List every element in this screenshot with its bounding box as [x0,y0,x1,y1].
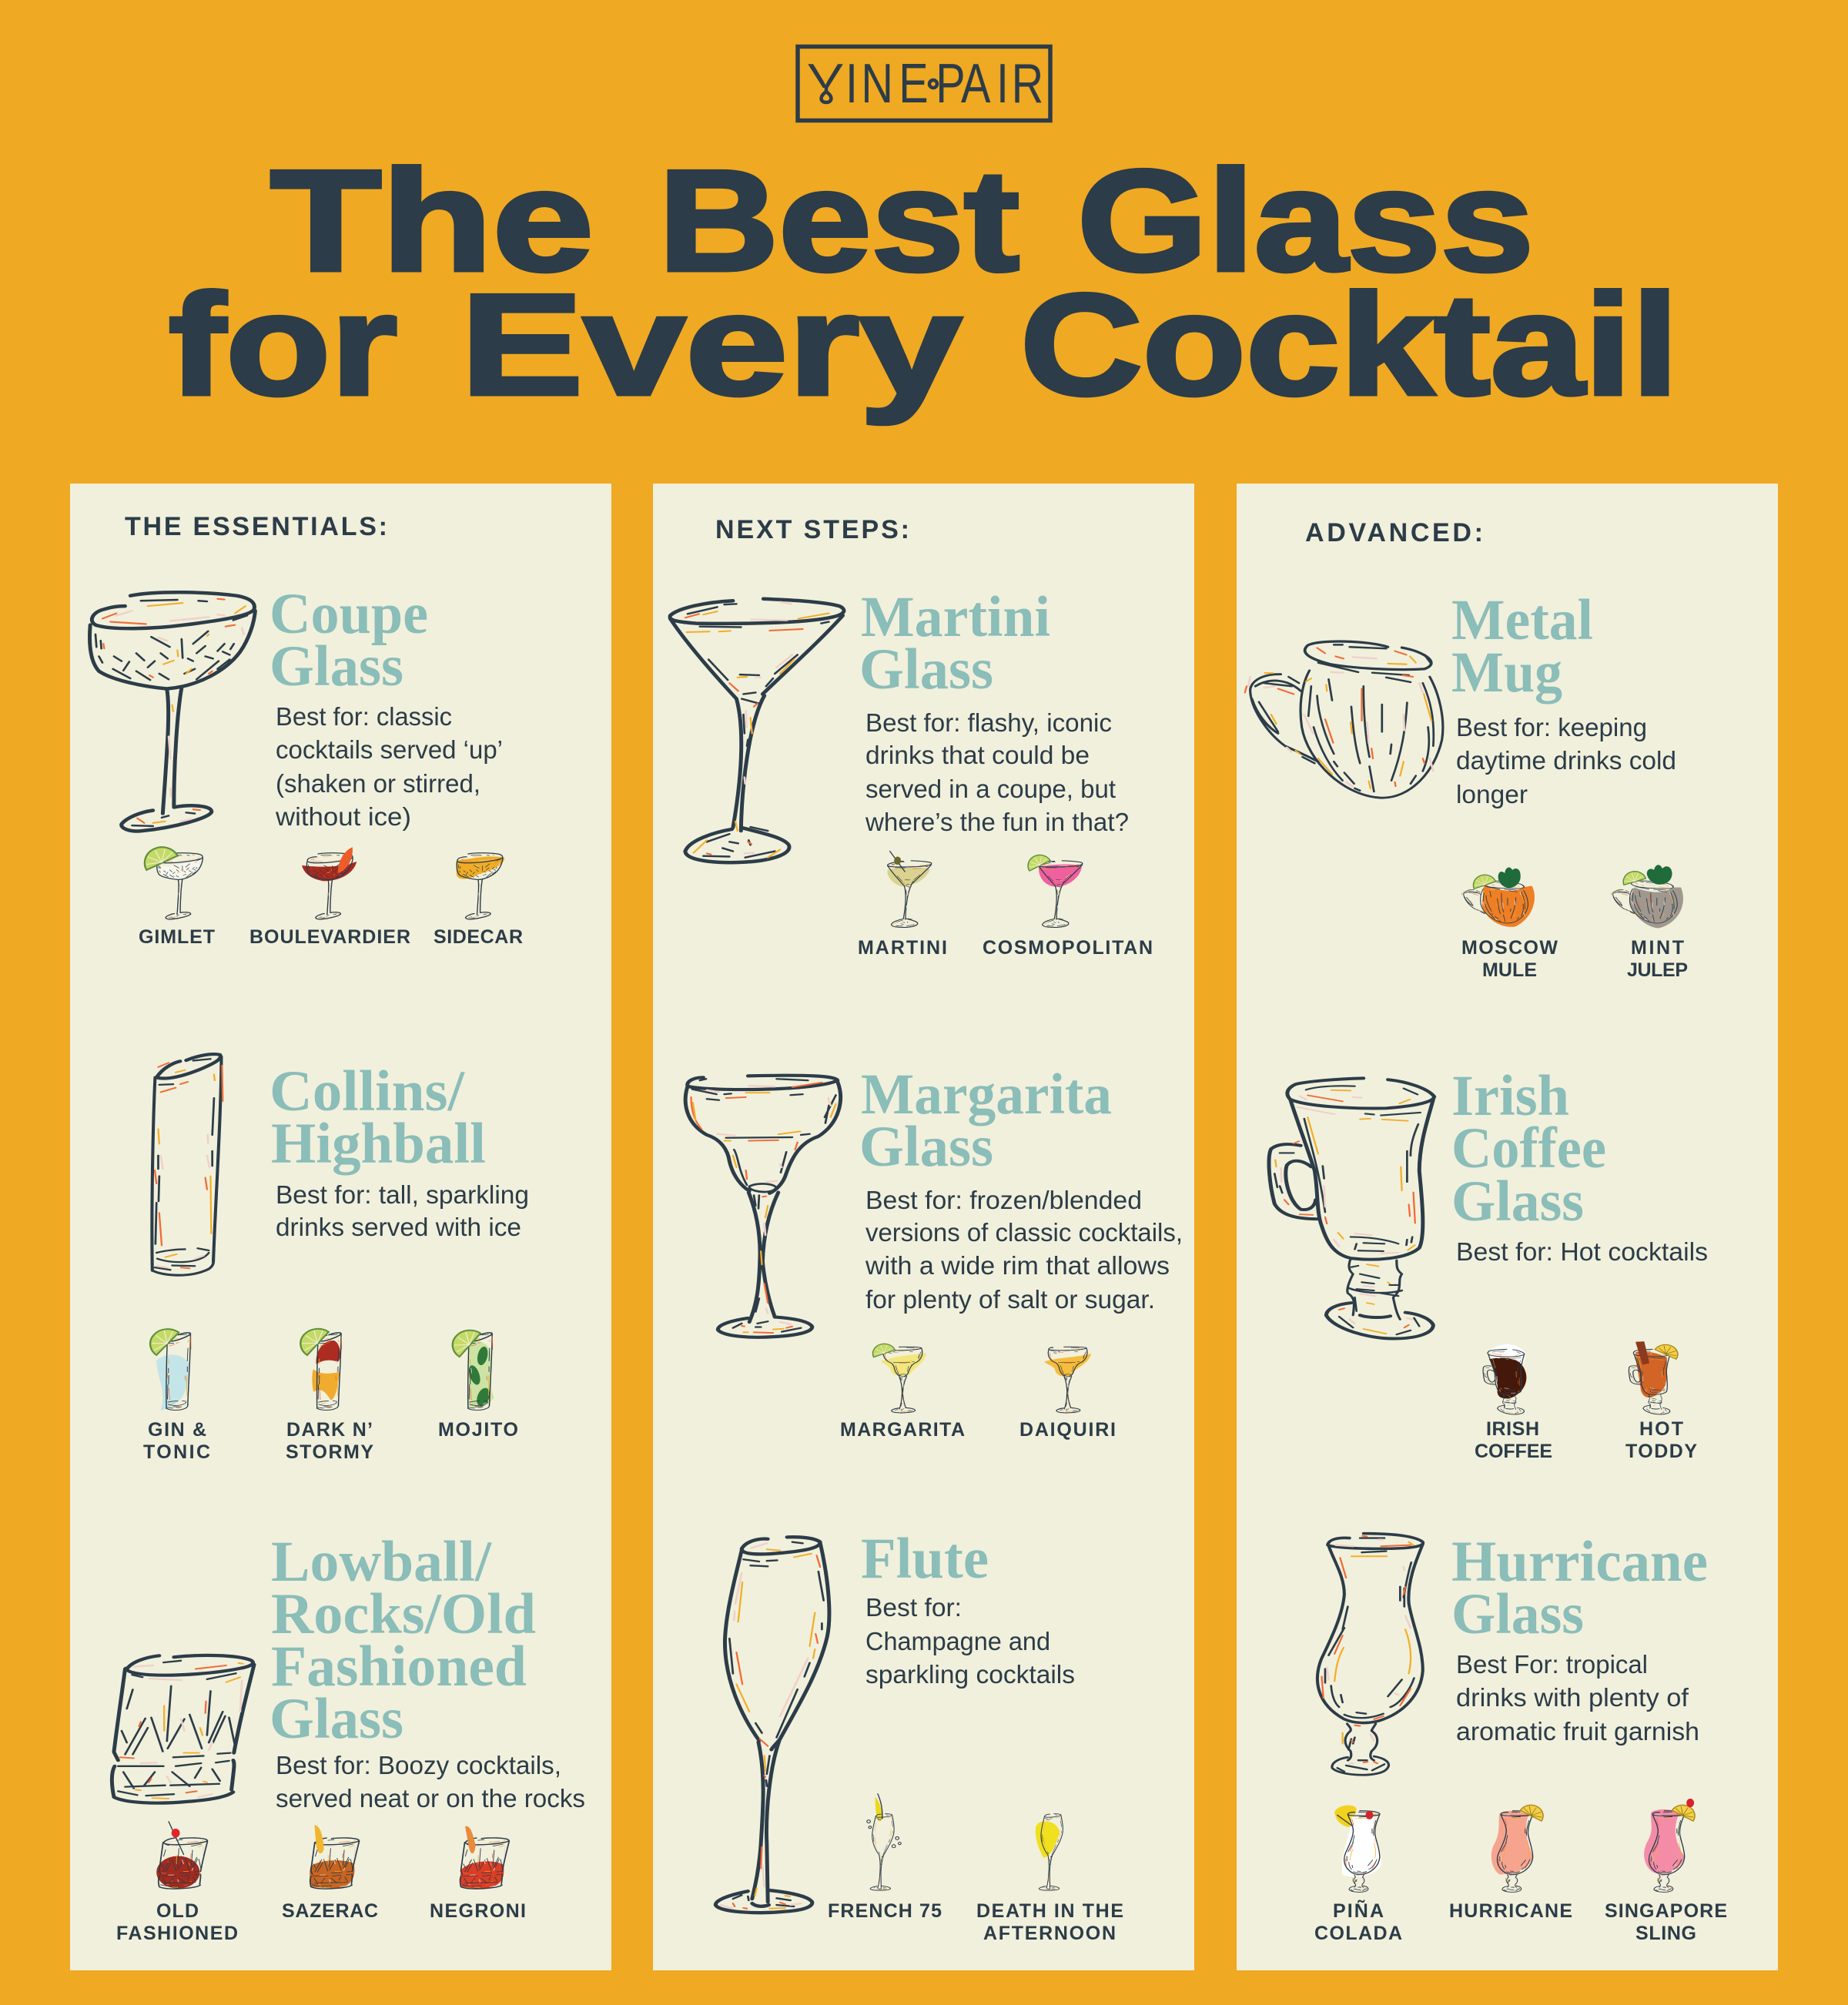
description: martini [865,708,1129,836]
drink icon: margarita [869,1341,926,1413]
description: margarita: versions of classic cocktails, [865,1218,1183,1247]
label: death in the afternoon: DEATH IN THE [976,1900,1123,1922]
glass name: metal mug: Metal [1451,588,1593,652]
description: margarita: for plenty of salt or sugar. [865,1285,1155,1314]
description: martini: where’s the fun in that? [865,808,1129,836]
label: cosmopolitan: COSMOPOLITAN [983,937,1153,959]
drink icon: pina colada [1334,1806,1381,1892]
icon: lowball glass [112,1655,254,1803]
drink icon: old fashioned [156,1822,208,1889]
glass name: margarita: Margarita [861,1063,1112,1126]
description: coupe [275,702,503,831]
logo: VinePair [798,46,1050,120]
label: sidecar: SIDECAR [434,926,523,948]
heading: the essentials: THE ESSENTIALS: [125,512,387,541]
drink icon: cosmopolitan [1024,851,1083,927]
glass name: lowball: Lowball/ [271,1530,492,1594]
description: martini: served in a coupe, but [865,775,1116,803]
label: hurricane: HURRICANE [1449,1900,1572,1922]
label: sazerac: SAZERAC [282,1900,378,1922]
description: flute: Best for: [865,1593,962,1622]
description: metal mug: daytime drinks cold [1456,746,1676,775]
description: lowball [276,1751,585,1813]
drink icon: boulevardier [302,847,357,919]
glass name: margarita: Glass [859,1115,993,1179]
description: collins: Best for: tall, sparkling [276,1180,529,1209]
title: The [270,140,594,301]
drink icon: dark n stormy [293,1323,342,1410]
label: pina colada [1314,1899,1402,1944]
logo: VinePair: V [808,57,843,95]
icon: martini glass [670,599,844,862]
label: old fashioned: OLD [156,1900,199,1922]
drink icon: hot toddy [1629,1341,1682,1414]
title: Every [460,264,962,425]
glass name: irish coffee: Glass [1451,1170,1584,1233]
glass name: martini: Martini [861,585,1050,649]
glass name: lowball: Glass [270,1687,403,1751]
label: pina colada: PIÑA [1333,1899,1384,1922]
icon: irish coffee glass [1269,1078,1435,1339]
label: negroni: NEGRONI [430,1900,526,1922]
icon: coupe glass [89,592,255,831]
glass name: hurricane: Glass [1451,1582,1584,1646]
title [169,140,1679,425]
description: margarita: Best for: frozen/blended [865,1186,1142,1214]
description: lowball: served neat or on the rocks [276,1784,585,1813]
description: hurricane: aromatic fruit garnish [1456,1717,1699,1746]
title: for [169,264,397,425]
logo: VinePair: INEPAIR [845,52,1043,114]
label: gin and tonic: GIN & [148,1419,206,1441]
glass name: irish coffee: Coffee [1451,1116,1606,1180]
label: boulevardier: BOULEVARDIER [249,926,410,948]
heading: next steps: NEXT STEPS: [715,515,909,544]
glass name: collins/highball: Highball [271,1112,486,1176]
drink icon: mint julep [1611,865,1683,929]
title: Cocktail [1020,264,1679,425]
label: irish coffee: COFFEE [1475,1441,1552,1462]
label: mojito: MOJITO [438,1419,518,1441]
drink icon: negroni [460,1826,509,1890]
icon: metal mug [1245,641,1443,798]
drink icon: hurricane [1491,1801,1548,1892]
glass name: coupe [270,582,428,698]
glass name: hurricane [1451,1530,1708,1646]
label: martini: MARTINI [858,937,947,959]
glass name: lowball [270,1530,536,1751]
glass name: martini: Glass [859,638,993,701]
description: collins [276,1180,529,1241]
label: death in the afternoon [976,1900,1123,1944]
description: coupe: Best for: classic [276,702,452,731]
description: flute: Champagne and [865,1627,1050,1655]
description: irish coffee: Best for: Hot cocktails [1456,1237,1708,1266]
label: mint julep: MINT [1631,937,1684,959]
glass name: margarita [859,1063,1112,1179]
description: hurricane: drinks with plenty of [1456,1683,1689,1712]
drink icon: irish coffee [1483,1344,1526,1414]
label: dark n stormy: DARK N’ [286,1419,373,1441]
glass name: metal mug [1451,588,1593,705]
label: death in the afternoon: AFTERNOON [983,1923,1116,1944]
label: dark n stormy [286,1419,373,1463]
description: lowball: Best for: Boozy cocktails, [276,1751,561,1779]
drink icon: french 75 [867,1794,901,1890]
drink icon: daiquiri [1044,1347,1091,1413]
drink icon: mojito [446,1324,494,1410]
label: irish coffee [1475,1418,1552,1462]
description: margarita [865,1186,1183,1314]
description: margarita: with a wide rim that allows [865,1251,1170,1280]
label: dark n stormy: STORMY [286,1441,373,1463]
description: flute: sparkling cocktails [865,1660,1075,1689]
label: hot toddy: TODDY [1625,1441,1697,1462]
label: old fashioned: FASHIONED [116,1923,238,1944]
icon: hurricane glass [1317,1534,1423,1775]
icon: margarita glass [685,1076,841,1337]
label: gin and tonic: TONIC [143,1441,210,1463]
label: mint julep: JULEP [1627,959,1688,981]
label: moscow mule [1461,937,1558,981]
description: hurricane [1456,1650,1699,1746]
label: singapore sling: SINGAPORE [1605,1900,1727,1922]
label: hot toddy: HOT [1639,1418,1683,1440]
glass name: hurricane: Hurricane [1451,1530,1708,1594]
glass name: metal mug: Mug [1451,641,1562,705]
description: coupe: (shaken or stirred, [276,769,480,798]
title: Glass [1077,140,1534,301]
heading: advanced: ADVANCED: [1305,518,1483,547]
glass name: irish coffee [1451,1064,1606,1233]
description: coupe: without ice) [275,802,411,831]
panel: next steps [653,484,1194,1970]
glass name: coupe: Coupe [270,582,428,646]
glass name: coupe: Glass [270,634,403,698]
description: metal mug [1456,713,1676,808]
label: gin and tonic [143,1419,210,1463]
glass name: flute: Flute [861,1527,989,1591]
drink icon: martini [887,852,932,927]
label: old fashioned [116,1900,238,1944]
label: margarita: MARGARITA [840,1419,965,1441]
label: gimlet: GIMLET [139,926,215,948]
glass name: collins/highball: Collins/ [270,1059,465,1123]
glass name: lowball: Rocks/Old [271,1582,536,1646]
label: moscow mule: MOSCOW [1461,937,1558,959]
label: daiquiri: DAIQUIRI [1019,1419,1116,1441]
icon: flute glass [715,1537,829,1913]
title: Best [658,140,1019,301]
label: irish coffee: IRISH [1486,1418,1539,1440]
label: french 75: FRENCH 75 [828,1900,942,1922]
label: mint julep [1627,937,1688,981]
description: martini: drinks that could be [865,741,1090,769]
drink icon: gimlet [139,842,203,919]
drink icon: gin and tonic [143,1323,191,1411]
drink icon: singapore sling [1644,1799,1699,1892]
label: moscow mule: MULE [1482,959,1537,981]
glass name: irish coffee: Irish [1451,1064,1569,1128]
panel: advanced [1237,484,1778,1970]
icon: collins glass [152,1054,223,1275]
description: metal mug: Best for: keeping [1456,713,1647,741]
glass name: lowball: Fashioned [271,1635,527,1699]
description: flute [865,1593,1075,1689]
drink icon: sidecar [457,853,504,919]
label: hot toddy [1625,1418,1697,1462]
description: collins: drinks served with ice [276,1213,521,1241]
description: coupe: cocktails served ‘up’ [276,735,503,764]
description: hurricane: Best For: tropical [1456,1650,1648,1679]
glass name: collins/highball [270,1059,486,1176]
glass name: martini [859,585,1050,701]
label: singapore sling: SLING [1635,1923,1696,1944]
description: metal mug: longer [1456,780,1528,808]
drink icon: death in the afternoon [1036,1814,1063,1890]
drink icon: moscow mule [1461,867,1535,927]
label: singapore sling [1605,1900,1727,1944]
label: pina colada: COLADA [1314,1923,1402,1944]
drink icon: sazerac [310,1825,360,1889]
panel: the essentials [70,484,611,1970]
description: martini: Best for: flashy, iconic [865,708,1112,737]
